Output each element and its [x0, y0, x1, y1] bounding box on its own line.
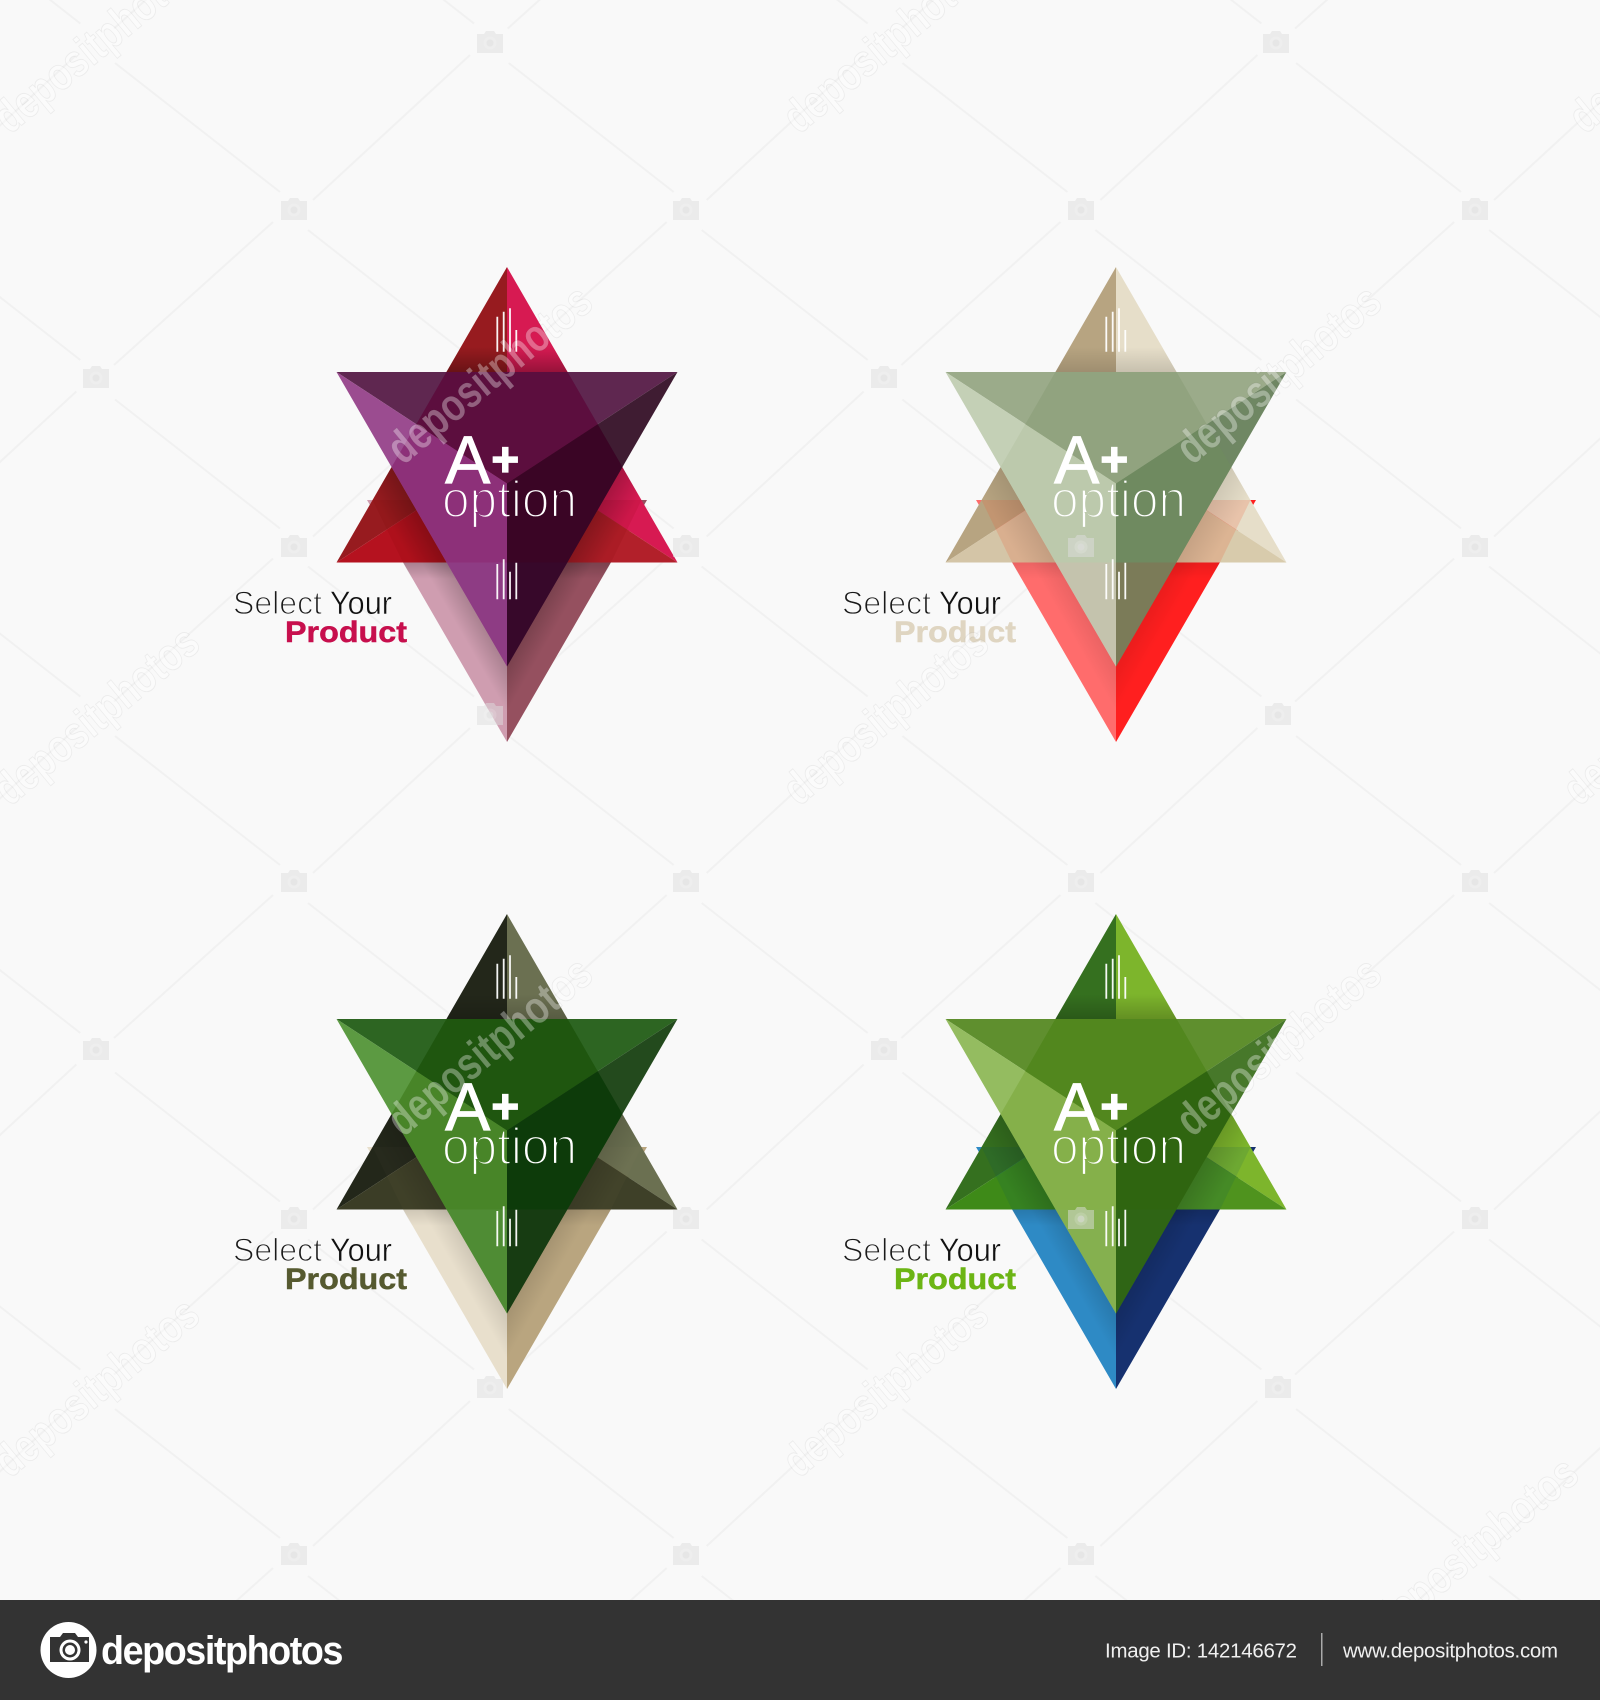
- rear triangle: [976, 500, 1256, 742]
- bottom tick bars: [1106, 1206, 1125, 1246]
- bottom tick bars: [497, 1206, 516, 1246]
- upper triangle: [336, 267, 678, 562]
- top tick bars: [1106, 955, 1125, 999]
- A+ label: A: [1054, 1069, 1100, 1145]
- Product caption: Product: [894, 616, 1016, 649]
- upper triangle: [946, 914, 1286, 1210]
- footer logo: [40, 1622, 342, 1678]
- front triangle: [946, 1019, 1286, 1314]
- star: crimson and purple: [233, 267, 678, 742]
- Select Your caption: Select: [842, 1232, 931, 1268]
- Select Your caption: [842, 1232, 1001, 1268]
- front triangle: [946, 372, 1286, 666]
- upper triangle: [336, 914, 678, 1210]
- A+ label: +: [491, 1081, 519, 1134]
- Select Your caption: [233, 585, 392, 621]
- A+ label: +: [491, 434, 519, 487]
- watermark wordmarks: depositphotos: [376, 274, 602, 474]
- Product caption: Product: [285, 616, 407, 649]
- front triangle: [336, 1019, 678, 1314]
- watermark wordmarks: depositphotos: [772, 1287, 998, 1487]
- option label: option: [442, 471, 577, 529]
- star: sand and sage with red: [842, 267, 1286, 742]
- image id: Image ID: 142146672: [1105, 1640, 1297, 1662]
- watermark camera icons: [83, 31, 1488, 1565]
- site url: www.depositphotos.com: [1342, 1640, 1558, 1662]
- A+ label: A: [445, 422, 491, 498]
- top tick bars: [497, 308, 516, 352]
- rear triangle: [367, 500, 647, 742]
- star: bright green and blue: [842, 914, 1286, 1389]
- Select Your caption: Your: [939, 1232, 1001, 1268]
- Select Your caption: Your: [330, 585, 392, 621]
- Select Your caption: [842, 585, 1001, 621]
- Select Your caption: Select: [233, 1232, 322, 1268]
- A+ label: [445, 422, 519, 498]
- Select Your caption: Select: [842, 585, 931, 621]
- watermark wordmarks: depositphotos: [1165, 946, 1391, 1146]
- A+ label: A: [445, 1069, 491, 1145]
- top tick bars: [497, 955, 516, 999]
- bottom tick bars: [1106, 559, 1125, 599]
- Select Your caption: Select: [233, 585, 322, 621]
- top tick bars: [1106, 308, 1125, 352]
- footer divider: [1321, 1633, 1322, 1666]
- watermark wordmarks: depositphotos: [376, 946, 602, 1146]
- Select Your caption: Your: [330, 1232, 392, 1268]
- A+ label: [1054, 1069, 1128, 1145]
- rear triangle: [367, 1147, 647, 1389]
- A+ label: +: [1100, 434, 1128, 487]
- option label: option: [442, 1118, 577, 1176]
- A+ label: [1054, 422, 1128, 498]
- Product caption: Product: [285, 1263, 407, 1296]
- option label: option: [1051, 1118, 1186, 1176]
- front triangle: [336, 372, 678, 666]
- watermark wordmarks: depositphotos: [1165, 274, 1391, 474]
- A+ label: +: [1100, 1081, 1128, 1134]
- A+ label: A: [1054, 422, 1100, 498]
- watermark wordmarks: depositphotos: [772, 615, 998, 815]
- footer logo: depositphotos: [101, 1629, 342, 1673]
- Select Your caption: Your: [939, 585, 1001, 621]
- bottom tick bars: [497, 559, 516, 599]
- star: dark olive and green: [233, 914, 678, 1389]
- Product caption: Product: [894, 1263, 1016, 1296]
- rear triangle: [976, 1147, 1256, 1389]
- upper triangle: [946, 267, 1286, 562]
- footer bar: [0, 1600, 1600, 1700]
- A+ label: [445, 1069, 519, 1145]
- option label: option: [1051, 471, 1186, 529]
- Select Your caption: [233, 1232, 392, 1268]
